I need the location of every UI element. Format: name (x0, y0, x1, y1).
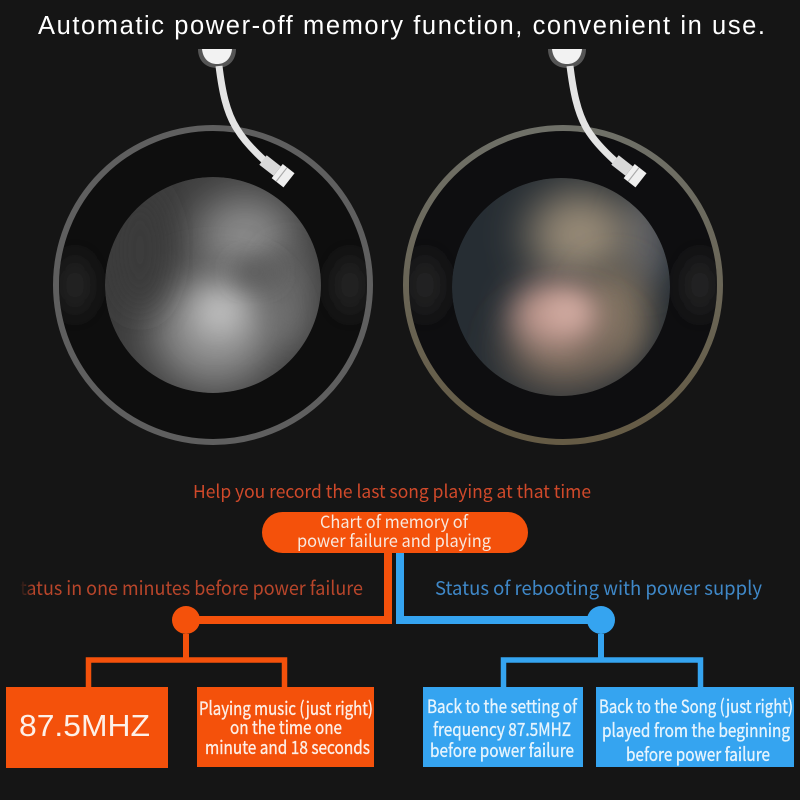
box: back to song: before power failure (626, 741, 770, 767)
heading: before power failure: tatus in one minutes before power failure (20, 574, 363, 601)
box: back to frequency (423, 687, 583, 767)
colour blurred photo label (452, 178, 671, 396)
caption: record last song: Help you record the last song playing at that time (193, 478, 591, 504)
box: playing music: on the time one (230, 714, 342, 740)
box: frequency: 87.5MHZ (19, 708, 150, 743)
chart title pill: power failure and playing (297, 527, 491, 552)
box: back to frequency: before power failure (430, 737, 574, 763)
box: playing music: Playing music (just right) (199, 695, 373, 721)
box: playing music (197, 687, 374, 767)
chart title pill (262, 508, 528, 553)
box: frequency (6, 687, 168, 768)
box: back to song (596, 687, 794, 767)
box: back to frequency: Back to the setting of (427, 693, 578, 719)
connector: blue branch (400, 553, 700, 687)
node: orange (172, 606, 200, 634)
tonearm (198, 49, 295, 187)
chart title pill: Chart of memory of (320, 508, 469, 533)
box: back to frequency: frequency 87.5MHZ (433, 716, 571, 742)
node: blue (587, 606, 615, 634)
heading: rebooting: Status of rebooting with power supply (435, 574, 762, 601)
title: Automatic power-off memory function, convenient in use. (38, 12, 765, 40)
record: grayscale turntable (56, 49, 370, 442)
box: playing music: minute and 18 seconds (205, 734, 370, 760)
grayscale blurred photo label (105, 177, 321, 393)
connector: orange branch (88, 553, 388, 687)
tonearm (548, 49, 647, 187)
record: colour turntable (406, 49, 720, 442)
